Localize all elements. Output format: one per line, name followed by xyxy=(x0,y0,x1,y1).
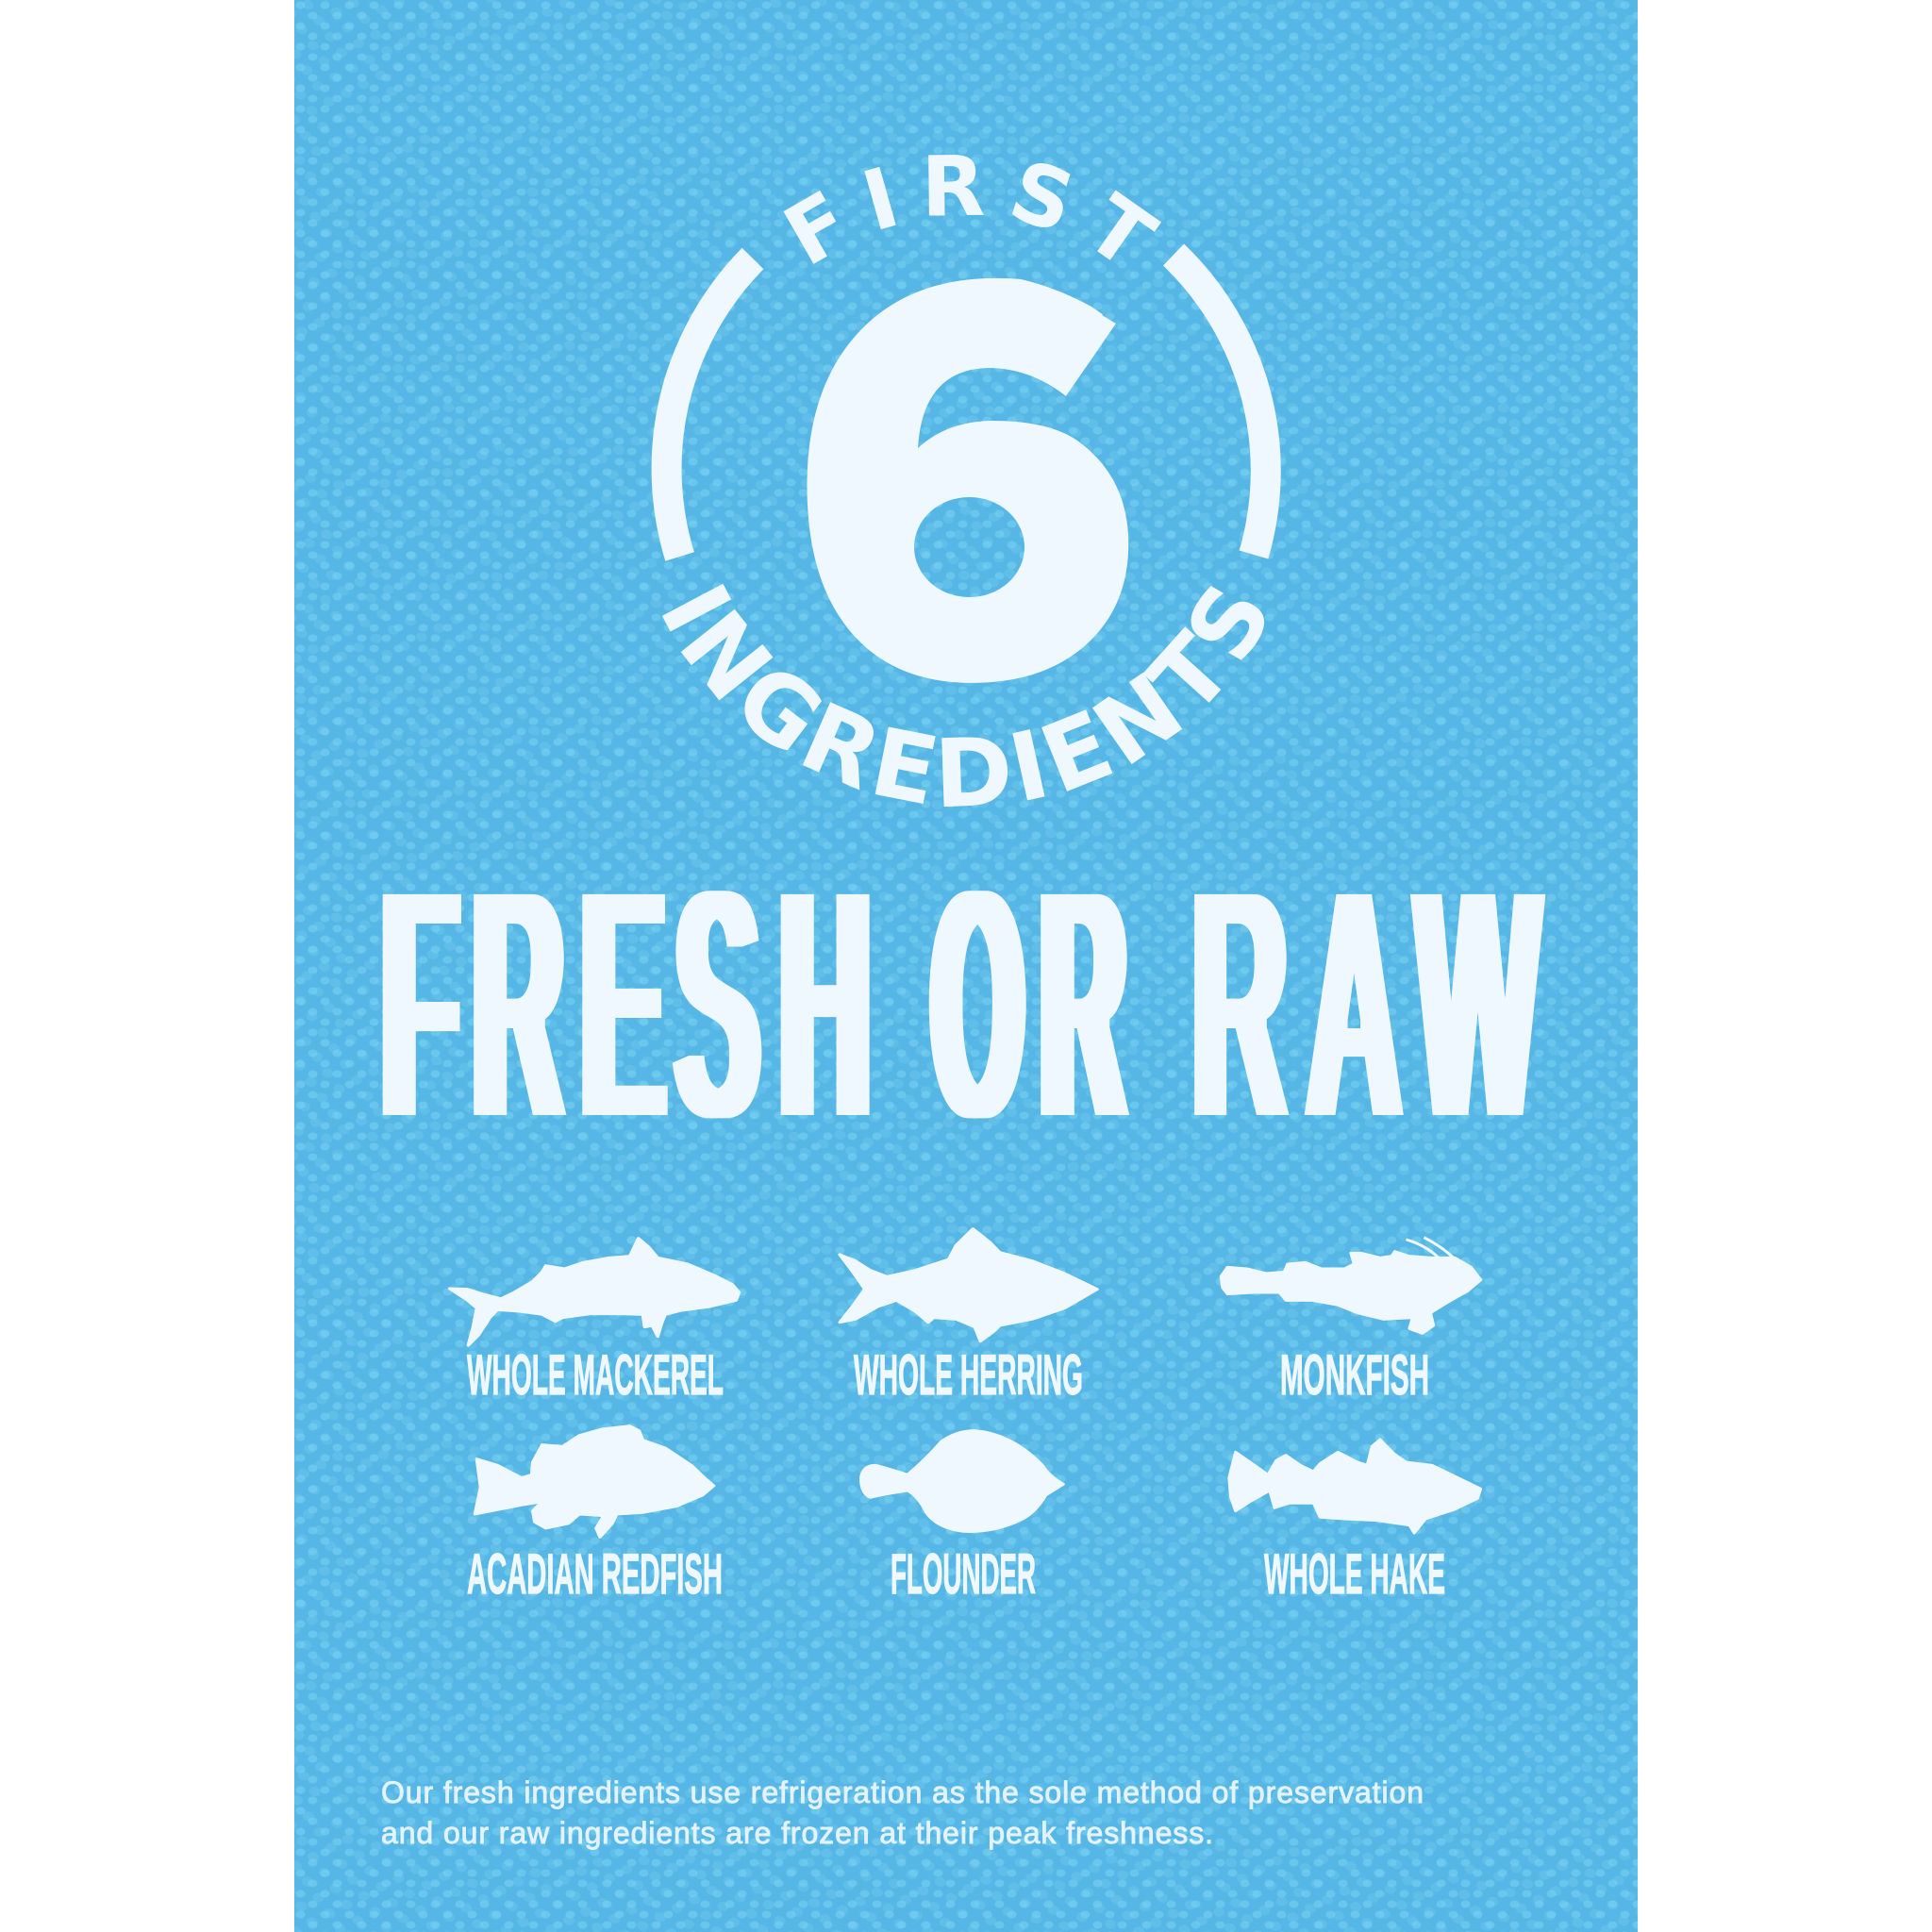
numeral 6: 6 xyxy=(776,183,1155,798)
word: or: OR xyxy=(933,818,1124,1190)
word: fresh: FRESH xyxy=(382,819,871,1190)
fish item: monkfish: MONKFISH xyxy=(1280,1343,1429,1407)
numeral 6 xyxy=(808,277,1128,683)
infographic poster: ACADIAN REDFISH xyxy=(467,1542,723,1606)
fish item: acadian redfish xyxy=(467,1426,723,1606)
infographic poster xyxy=(294,0,1638,1932)
icon: redfish xyxy=(475,1426,714,1537)
fish item: monkfish xyxy=(1221,1238,1481,1407)
ring arc right xyxy=(1174,255,1266,555)
word: raw: RAW xyxy=(1192,819,1541,1190)
fish item: flounder: FLOUNDER xyxy=(891,1542,1036,1606)
icon: herring xyxy=(840,1229,1097,1341)
fish item: whole herring xyxy=(840,1229,1097,1407)
fish item: whole hake xyxy=(1229,1440,1481,1606)
footer note: Our fresh ingredients use refrigeration as the sole method of preservation xyxy=(381,1775,1424,1809)
icon: monkfish xyxy=(1221,1238,1481,1333)
infographic poster: WHOLE HERRING xyxy=(854,1343,1083,1407)
fish item: whole mackerel xyxy=(450,1239,739,1407)
heading: fresh or raw xyxy=(382,818,1541,1190)
fish item: whole hake: WHOLE HAKE xyxy=(1264,1542,1445,1606)
infographic poster: WHOLE MACKEREL xyxy=(467,1343,724,1407)
icon: flounder xyxy=(861,1431,1063,1531)
icon: mackerel xyxy=(450,1239,739,1345)
badge: first 6 ingredients xyxy=(651,155,1281,808)
ring arc left xyxy=(667,258,753,557)
icon: hake xyxy=(1229,1440,1481,1533)
footer note xyxy=(381,1775,1424,1850)
curved text: ingredients: INGREDIENTS xyxy=(662,583,1264,808)
panel: blue scale-textured background xyxy=(294,0,1638,1932)
footer note: and our raw ingredients are frozen at their peak freshness. xyxy=(381,1816,1213,1850)
fish item: flounder xyxy=(861,1431,1063,1606)
curved text: first: FIRST xyxy=(783,155,1161,264)
